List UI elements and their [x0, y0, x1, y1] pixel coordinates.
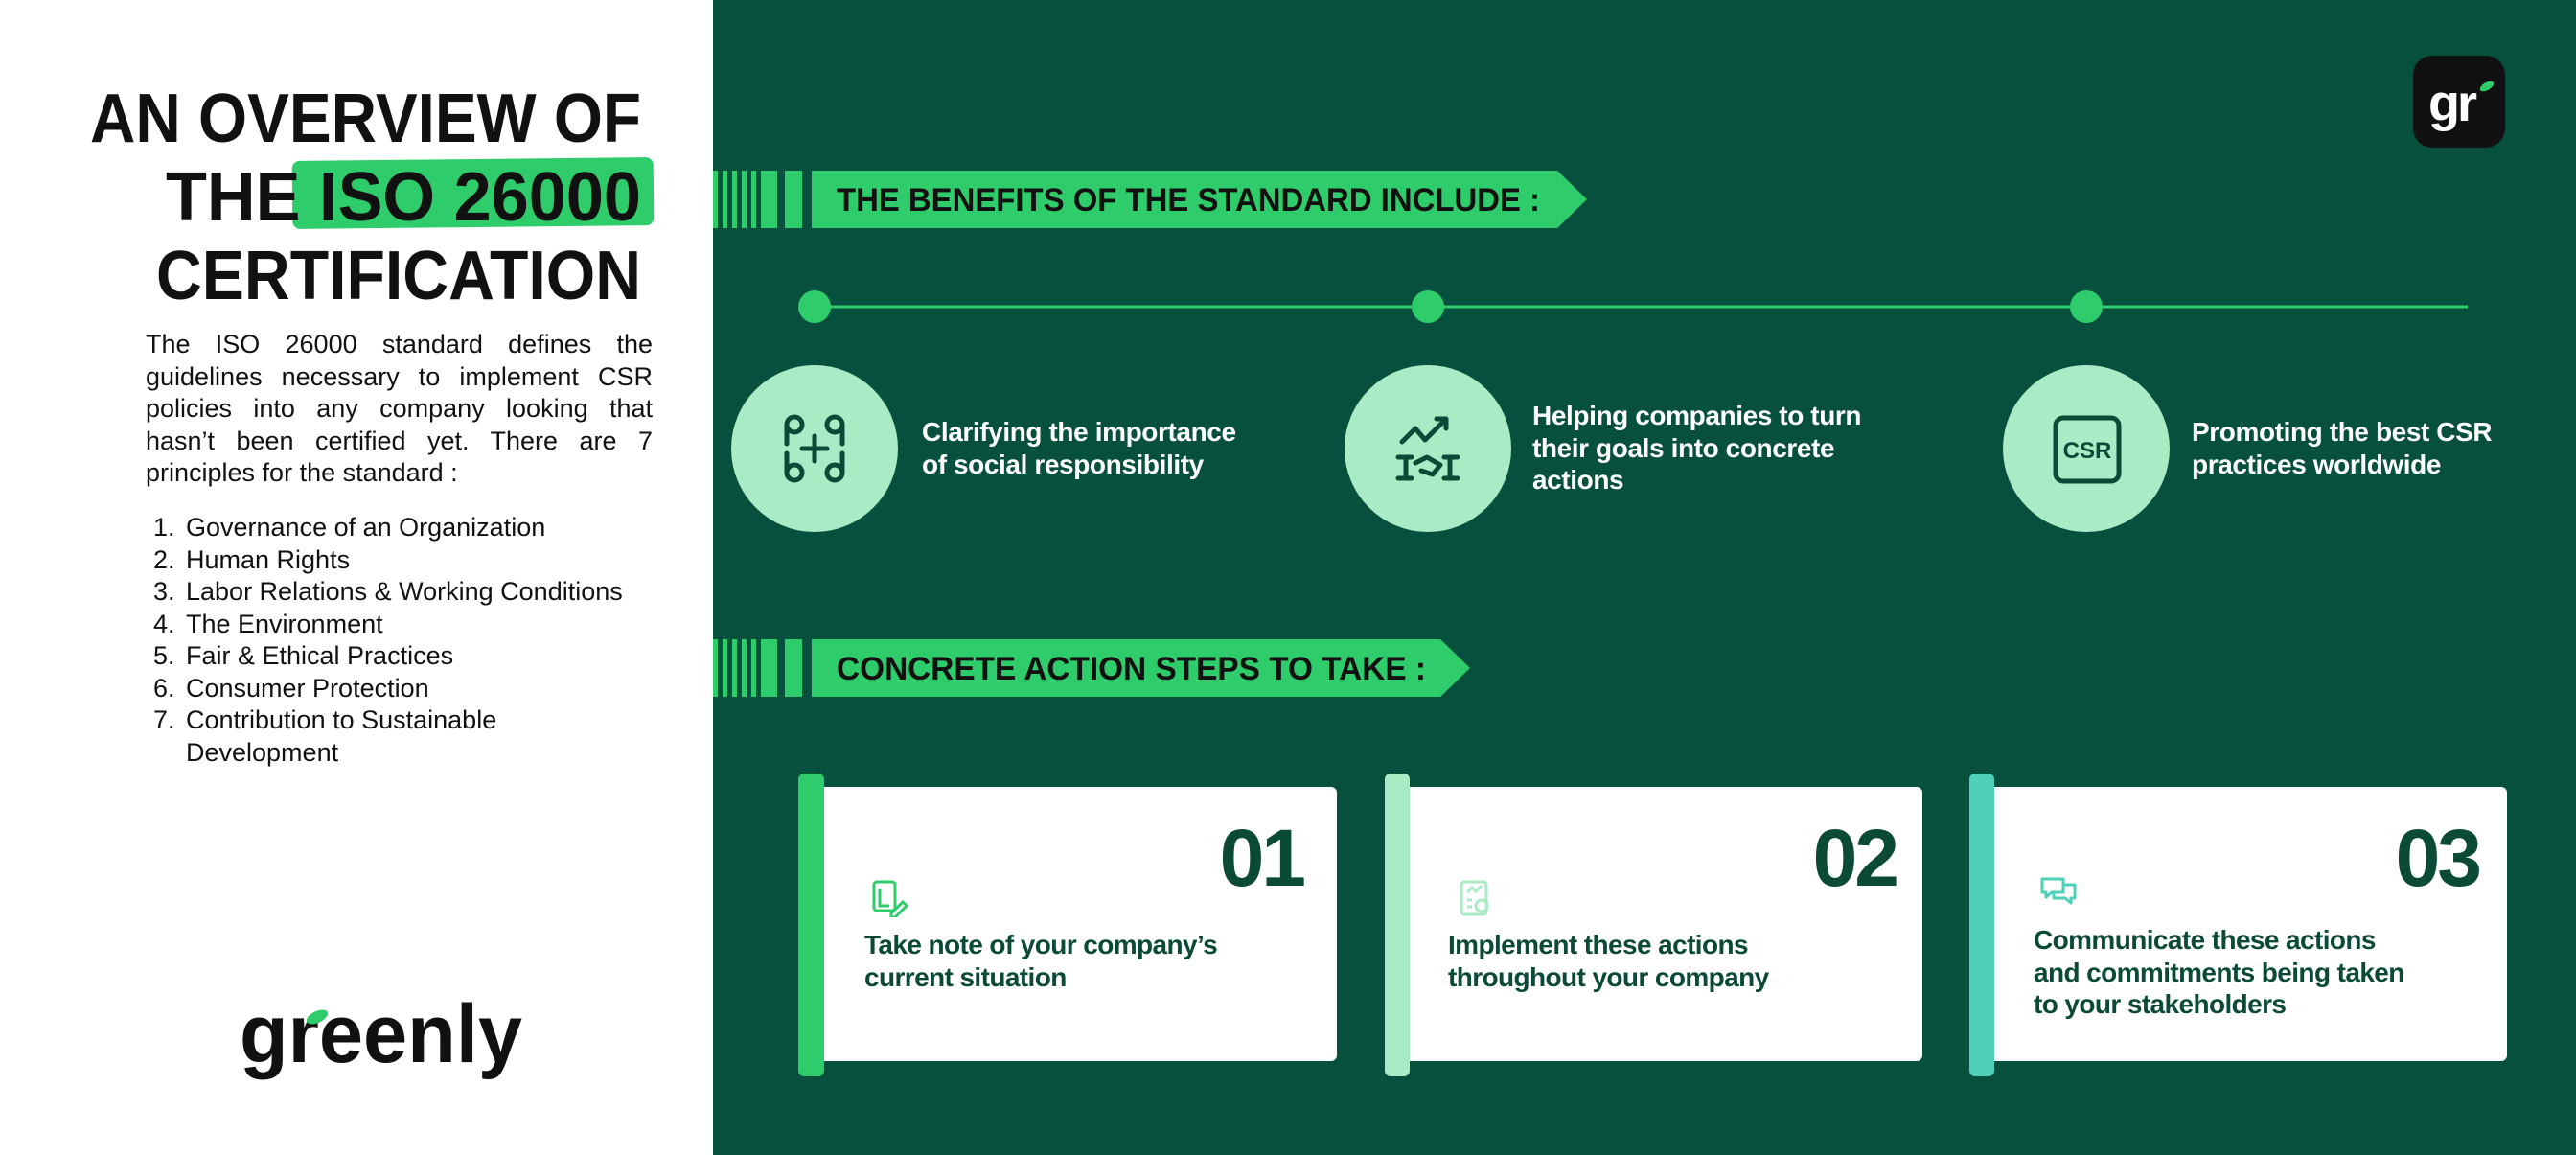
panel: left white column	[0, 0, 713, 1155]
icon: chat bubbles	[2041, 878, 2076, 905]
card 3	[1969, 774, 2507, 1076]
text	[864, 930, 1217, 991]
text: their goals into concrete	[1532, 433, 1834, 462]
text: Helping companies to turn	[1532, 401, 1861, 430]
principles list: 2.	[153, 544, 175, 573]
card 2	[1385, 774, 1922, 1076]
intro paragraph	[146, 330, 653, 487]
principles list: Labor Relations & Working Conditions	[186, 577, 623, 606]
intro paragraph: hasn’t been certified yet. There are 7	[146, 426, 653, 454]
principles list: 5.	[153, 641, 175, 670]
timeline	[798, 290, 2468, 323]
title: THE ISO 26000	[166, 159, 641, 236]
text: Implement these actions	[1448, 930, 1748, 959]
text	[1532, 401, 1861, 495]
text	[2192, 417, 2492, 479]
principles list: 6.	[153, 673, 175, 702]
benefit 2	[1345, 365, 1861, 532]
principles list	[153, 513, 623, 767]
principles list: Consumer Protection	[186, 673, 429, 702]
icon: notepad	[872, 880, 908, 917]
icon: checklist	[1460, 880, 1489, 916]
intro paragraph: policies into any company looking that	[146, 394, 653, 423]
number: 02	[1813, 813, 1897, 903]
title: AN OVERVIEW OF	[90, 81, 641, 157]
icon: CSR badge	[2003, 365, 2170, 532]
text: throughout your company	[1448, 962, 1769, 991]
banner: benefits heading	[713, 171, 1587, 228]
highlight	[292, 157, 654, 229]
panel: left white column: Development	[186, 738, 338, 767]
intro paragraph: The ISO 26000 standard defines the	[146, 330, 653, 358]
banner: action steps heading	[713, 639, 1470, 697]
benefit 3	[2003, 365, 2492, 532]
intro paragraph: guidelines necessary to implement CSR	[146, 362, 653, 391]
principles list: 3.	[153, 577, 175, 606]
intro paragraph: principles for the standard :	[146, 458, 458, 487]
title: CERTIFICATION	[156, 238, 641, 314]
banner: benefits heading: THE BENEFITS OF THE STANDARD INCLUDE :	[837, 182, 1540, 219]
principles list: Contribution to Sustainable	[186, 705, 496, 734]
card 1	[798, 774, 1337, 1076]
text	[922, 417, 1236, 479]
principles list: Human Rights	[186, 544, 350, 573]
text: of social responsibility	[922, 449, 1204, 479]
logo: gr app icon	[2413, 56, 2505, 148]
text: Communicate these actions	[2034, 925, 2376, 955]
number: 01	[1220, 813, 1303, 903]
text: and commitments being taken	[2034, 957, 2404, 987]
text: practices worldwide	[2192, 449, 2441, 479]
text: Clarifying the importance	[922, 417, 1236, 447]
principles list: Governance of an Organization	[186, 513, 545, 542]
icon: people plus	[731, 365, 898, 532]
number: 03	[2396, 813, 2479, 903]
title	[90, 81, 654, 314]
text: Promoting the best CSR	[2192, 417, 2492, 447]
text	[1448, 930, 1769, 992]
banner: action steps heading: CONCRETE ACTION STEPS TO TAKE :	[837, 651, 1426, 687]
principles list: Fair & Ethical Practices	[186, 641, 453, 670]
benefit 1	[731, 365, 1236, 532]
principles list: 1.	[153, 513, 175, 542]
text: Take note of your company’s	[864, 930, 1217, 959]
principles list: 4.	[153, 610, 175, 638]
text: actions	[1532, 465, 1623, 495]
principles list: The Environment	[186, 610, 383, 638]
icon: CSR badge: CSR	[2063, 438, 2111, 464]
logo: gr app icon: gr	[2428, 75, 2477, 132]
text	[2034, 925, 2404, 1019]
principles list: 7.	[153, 705, 175, 734]
icon: handshake growth	[1345, 365, 1511, 532]
text: to your stakeholders	[2034, 989, 2286, 1019]
text: current situation	[864, 962, 1067, 991]
